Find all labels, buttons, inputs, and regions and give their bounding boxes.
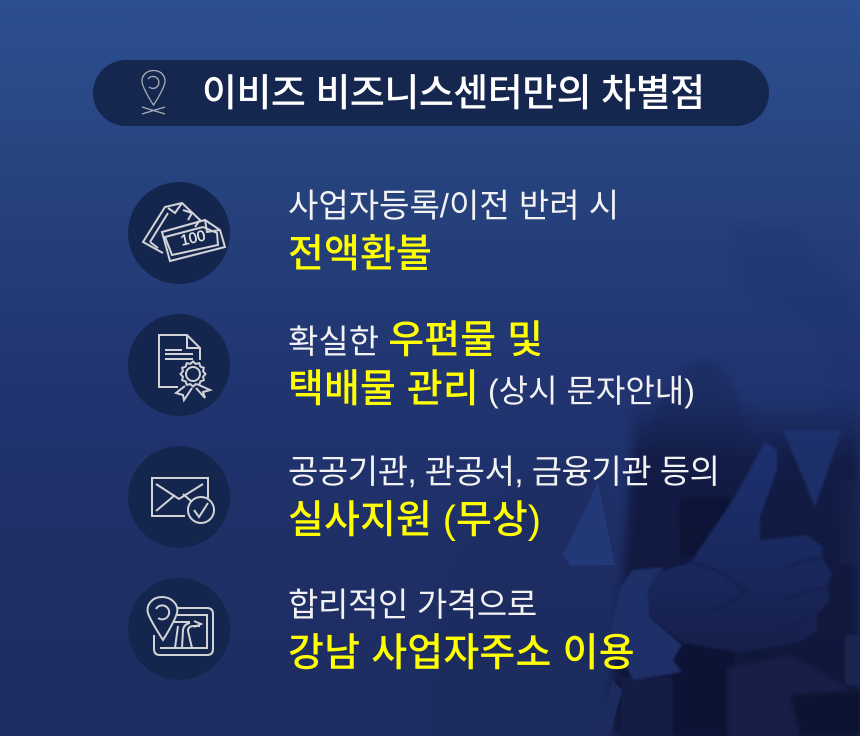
tie	[783, 430, 842, 507]
item 2 text: 확실한 우편물 및	[288, 319, 543, 362]
item 3 text: 공공기관, 관공서, 금융기관 등의	[288, 453, 720, 490]
title bar	[93, 60, 769, 126]
item 4 text: 강남 사업자주소 이용	[288, 632, 635, 675]
cuff	[610, 567, 682, 680]
item 1 text: 사업자등록/이전 반려 시	[288, 187, 619, 224]
item 3 text: 실사지원 (무상)	[288, 499, 541, 542]
item 1 icon: money	[128, 182, 230, 284]
title text: 이비즈 비즈니스센터만의 차별점	[202, 73, 705, 115]
item 3 text	[288, 453, 720, 542]
item 4 text	[288, 586, 635, 675]
item 2 icon: certificate	[128, 314, 230, 416]
hand	[648, 442, 832, 653]
item 1 text: 전액환불	[288, 233, 432, 276]
city buildings	[680, 497, 730, 557]
item 1 icon: money: 100	[179, 227, 207, 250]
icon: location pin	[141, 70, 166, 115]
item 2 text	[288, 319, 695, 411]
item 4 text: 합리적인 가격으로	[288, 586, 537, 623]
item 2 text: 택배물 관리 (상시 문자안내)	[288, 368, 695, 411]
item 4 icon: map with pin	[128, 578, 230, 680]
item 3 icon: envelope with check	[128, 446, 230, 548]
lapel triangle	[563, 482, 615, 566]
item 1 text	[288, 187, 619, 276]
